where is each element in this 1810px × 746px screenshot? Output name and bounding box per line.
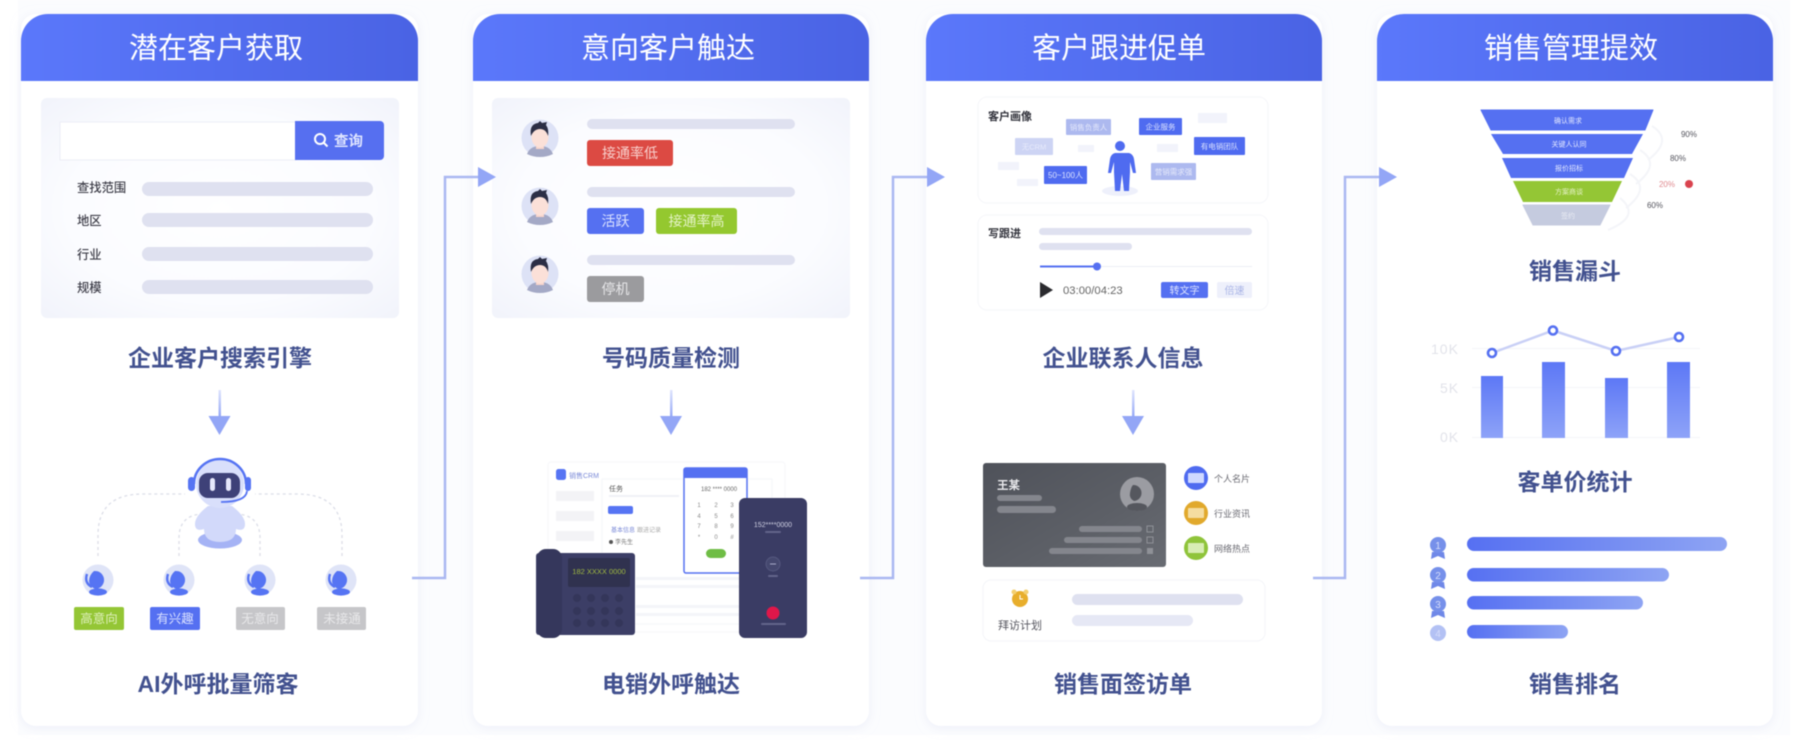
dialer: 0 (714, 535, 718, 541)
dialer: 9 (730, 524, 734, 530)
funnel percentages: 60% (1647, 201, 1663, 210)
arrow down (208, 390, 230, 435)
dialer: * (698, 535, 701, 541)
desk phone: 182 XXXX 0000 (572, 567, 626, 576)
ranking bars: 1 (1435, 541, 1441, 552)
search button (295, 121, 384, 160)
CRM window with dialer and phones (536, 462, 807, 638)
persona tags: 销售负责人 (1070, 122, 1108, 132)
persona tags: 企业服务 (1146, 122, 1176, 132)
row: low connection rate (522, 119, 795, 166)
row: out of service (522, 255, 795, 302)
caption: 销售漏斗: 销售漏斗 (1529, 258, 1621, 284)
CRM window with dialer and phones: 基本信息 (611, 526, 635, 534)
funnel stages: 方案商谈 (1555, 187, 1583, 196)
button: 转文字 (1161, 282, 1208, 298)
search form mock-up: 行业 (77, 248, 102, 262)
ranking bars: 4 (1435, 629, 1441, 640)
button: 倍速 (1217, 282, 1252, 298)
icon: play (1040, 282, 1053, 298)
lead: 高意向: 高意向 (80, 611, 118, 626)
number quality list (492, 98, 850, 318)
funnel stages: 签约 (1561, 211, 1575, 220)
dialer: 2 (714, 503, 718, 509)
header: 意向客户触达 (473, 14, 869, 81)
header: 客户跟进促单 (926, 14, 1322, 81)
item: 网络热点: 网络热点 (1214, 543, 1250, 554)
persona tags: 营销需求强 (1155, 166, 1193, 176)
header: 销售管理提效: 销售管理提效 (1484, 32, 1658, 65)
dialer: 182 **** 0000 (701, 487, 738, 493)
panel: 意向客户触达 (473, 14, 869, 726)
row: active, high connection rate (522, 187, 795, 234)
button: 倍速: 倍速 (1224, 284, 1244, 297)
persona tags (1015, 118, 1245, 184)
caption: 企业客户搜索引擎: 企业客户搜索引擎 (128, 345, 312, 371)
arrow down (660, 390, 682, 435)
lead: 未接通 (317, 564, 366, 630)
row: low connection rate: 接通率低 (602, 145, 658, 161)
caption: AI外呼批量筛客: AI外呼批量筛客 (138, 671, 298, 697)
visit plan card: 拜访计划 (998, 619, 1042, 632)
dialer: 4 (697, 514, 701, 520)
follow-up recording card: 03:00/04:23 (1063, 285, 1123, 297)
item: 个人名片 (1184, 466, 1250, 490)
dialer: # (730, 535, 734, 541)
dialer: 6 (730, 514, 734, 520)
icon: AI robot with headset (188, 459, 251, 548)
funnel stages (1481, 110, 1653, 225)
ranking bars (1430, 537, 1727, 641)
arrow: panel 1 to panel 2 (412, 167, 496, 578)
follow-up recording card: 写跟进 (988, 227, 1021, 240)
row: out of service: 停机 (602, 281, 630, 297)
row: active, high connection rate: 接通率高 (668, 213, 724, 229)
row: active, high connection rate: 活跃 (602, 213, 630, 229)
panel: 销售管理提效 (1377, 14, 1773, 726)
funnel stages: 关键人认同 (1552, 140, 1586, 148)
ranking bars: 3 (1435, 600, 1441, 611)
CRM window with dialer and phones: 任务 (609, 484, 623, 493)
dialer: 1 (697, 503, 701, 509)
funnel percentages: 90% (1681, 130, 1697, 139)
CRM window with dialer and phones: 销售CRM (569, 471, 599, 480)
business card: 王某 (997, 478, 1020, 492)
combo chart: bars and line (1431, 326, 1700, 445)
customer persona card (978, 97, 1268, 203)
header: 意向客户触达: 意向客户触达 (581, 32, 755, 65)
icon: alarm clock (1012, 590, 1028, 607)
mobile phone (739, 498, 807, 638)
business card (983, 463, 1166, 567)
arrow down (1122, 390, 1144, 435)
CRM window with dialer and phones: 跟进记录 (637, 526, 661, 534)
dialer (684, 468, 747, 573)
combo chart: bars and line: 5K (1440, 380, 1459, 396)
persona tags: 有电销团队 (1201, 141, 1239, 151)
item: 行业资讯 (1184, 501, 1250, 525)
panel: 客户跟进促单 (926, 14, 1322, 726)
combo chart: bars and line: 0K (1440, 429, 1459, 445)
dialer: 8 (714, 524, 718, 530)
funnel percentages: 80% (1670, 154, 1686, 163)
dashed links from robot to leads (98, 494, 342, 556)
caption: 电销外呼触达: 电销外呼触达 (602, 671, 740, 697)
lead: 未接通: 未接通 (323, 611, 361, 626)
item: 个人名片: 个人名片 (1214, 473, 1250, 484)
visit plan card (983, 580, 1265, 641)
funnel stages: 确认需求 (1554, 116, 1582, 125)
caption: 销售排名: 销售排名 (1529, 671, 1621, 697)
caption: 企业联系人信息: 企业联系人信息 (1042, 345, 1204, 371)
CRM window with dialer and phones: 李先生 (615, 538, 633, 546)
caption: 号码质量检测: 号码质量检测 (602, 345, 740, 371)
funnel percentages (1647, 130, 1697, 210)
caption: 客单价统计: 客单价统计 (1518, 469, 1632, 495)
customer persona card: 客户画像 (988, 109, 1032, 123)
button: 转文字: 转文字 (1170, 284, 1200, 297)
follow-up recording card (978, 215, 1268, 310)
header: 潜在客户获取 (21, 14, 418, 81)
panel: 潜在客户获取 (21, 14, 418, 726)
persona tags: 无CRM (1022, 142, 1046, 152)
arrow: panel 3 to panel 4 (1313, 167, 1397, 578)
mobile phone: 152****0000 (754, 522, 792, 529)
dialer: 7 (697, 524, 701, 530)
lead: 无意向 (236, 564, 285, 630)
ranking bars: 2 (1435, 571, 1441, 582)
item: 行业资讯: 行业资讯 (1214, 508, 1250, 519)
arrow: panel 2 to panel 3 (860, 167, 945, 578)
funnel percentages: 20% (1659, 180, 1675, 189)
header: 潜在客户获取: 潜在客户获取 (129, 32, 303, 65)
search form mock-up (41, 98, 399, 318)
header: 销售管理提效 (1377, 14, 1773, 81)
persona tags: 50~100人 (1048, 171, 1083, 180)
desk phone (536, 549, 635, 638)
dialer: 3 (730, 503, 734, 509)
funnel chart (1481, 110, 1697, 230)
search button: 查询 (334, 133, 363, 150)
lead: 高意向 (74, 564, 124, 630)
search form mock-up: 地区 (77, 213, 102, 228)
caption: 销售面签访单: 销售面签访单 (1054, 671, 1192, 697)
combo chart: bars and line: 10K (1431, 341, 1459, 357)
item: 网络热点 (1184, 536, 1250, 560)
lead: 有兴趣: 有兴趣 (156, 611, 194, 626)
dialer: 5 (714, 514, 718, 520)
lead: 有兴趣 (150, 564, 200, 630)
header: 客户跟进促单: 客户跟进促单 (1032, 32, 1206, 65)
search form mock-up: 查找范围 (77, 180, 126, 195)
search form mock-up: 规模 (77, 280, 102, 295)
funnel stages: 报价招标 (1555, 164, 1583, 172)
icon: person (1102, 141, 1138, 196)
lead: 无意向: 无意向 (241, 611, 279, 626)
